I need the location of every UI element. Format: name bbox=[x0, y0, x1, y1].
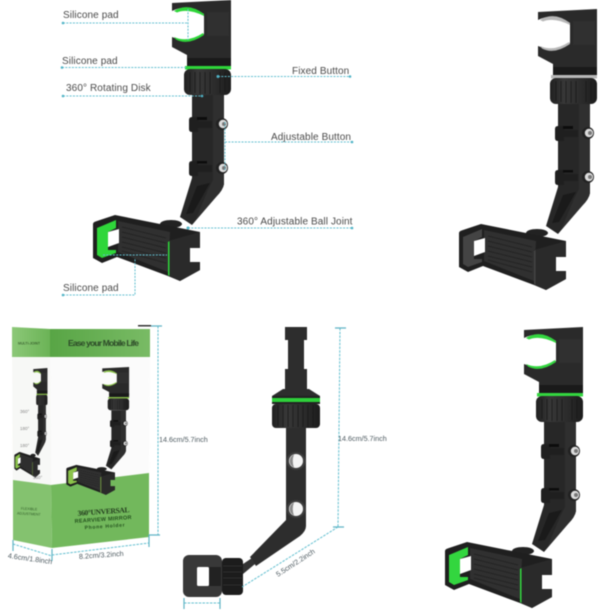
box small angle labels bbox=[20, 409, 43, 480]
depth dimension: 4.6cm/1.8inch bbox=[7, 551, 53, 566]
box top green band front bbox=[50, 329, 150, 357]
label: ball joint bbox=[186, 216, 353, 230]
box left face bbox=[12, 327, 52, 548]
height dimension: 14.6cm/5.7inch bbox=[159, 435, 208, 444]
width dimension bbox=[52, 543, 149, 561]
box dimensions bbox=[7, 326, 208, 566]
arm length dimension: 5.5cm/2.2inch bbox=[274, 547, 317, 579]
label: middle silicone pad: Silicone pad bbox=[62, 56, 118, 67]
arm length dimension bbox=[242, 527, 338, 587]
box bottom green band left bbox=[13, 480, 52, 548]
height dimension: 14.6cm/5.7inch bbox=[338, 434, 387, 443]
box text: product name: REARVIEW MIRROR bbox=[74, 515, 132, 525]
box text: product name: Phone Holder bbox=[84, 523, 125, 531]
box text: flexible adjustment: ADJUSTMENT bbox=[17, 511, 42, 517]
label: fixed button: Fixed Button bbox=[292, 66, 349, 77]
label: ball joint: 360° Adjustable Ball Joint bbox=[237, 216, 353, 228]
box small angle labels: 360° bbox=[33, 475, 43, 480]
box top green band left bbox=[12, 327, 50, 357]
label: fixed button bbox=[216, 66, 351, 78]
product photo: labelled green holder bbox=[93, 0, 231, 281]
depth dimension bbox=[7, 540, 53, 566]
label: top silicone pad: Silicone pad bbox=[63, 10, 119, 21]
height dimension bbox=[149, 326, 208, 547]
box image: holder, front bbox=[66, 367, 129, 495]
height dimension bbox=[333, 328, 387, 527]
box front face bbox=[50, 329, 150, 548]
label: bottom silicone pad bbox=[62, 255, 167, 296]
retail box bbox=[12, 325, 151, 548]
box text: product name bbox=[74, 505, 132, 532]
box bottom green band front bbox=[51, 473, 149, 548]
product photo: grey holder bbox=[459, 9, 597, 290]
box text: flexible adjustment: FLEXIBLE bbox=[21, 507, 38, 511]
box small angle labels: 180° bbox=[20, 443, 30, 448]
box text: multi-joint: MULTI-JOINT bbox=[18, 342, 41, 346]
box text: flexible adjustment bbox=[17, 506, 42, 517]
product photo: back view of holder bbox=[183, 327, 320, 597]
callouts: feature labels with leader lines bbox=[61, 9, 353, 296]
box small angle labels: 180° bbox=[20, 426, 30, 431]
box small angle labels: 360° bbox=[20, 409, 30, 414]
width dimension: 8.2cm/3.2inch bbox=[79, 549, 124, 561]
box text: product name: 360°UNVERSAL bbox=[77, 505, 130, 518]
product photo: green holder bottom right bbox=[445, 327, 583, 608]
label: adjustable button: Adjustable Button bbox=[271, 132, 351, 143]
label: middle silicone pad bbox=[61, 56, 187, 69]
label: bottom silicone pad: Silicone pad bbox=[63, 283, 119, 294]
holder dimensions bbox=[184, 328, 387, 609]
box image: holder, side bbox=[14, 368, 47, 478]
label: top silicone pad bbox=[62, 9, 188, 40]
box text: slogan: Ease your Mobile Life bbox=[68, 338, 139, 348]
clamp width dimension bbox=[184, 598, 220, 609]
label: rotating disk: 360° Rotating Disk bbox=[66, 83, 152, 94]
label: adjustable button bbox=[225, 122, 353, 170]
